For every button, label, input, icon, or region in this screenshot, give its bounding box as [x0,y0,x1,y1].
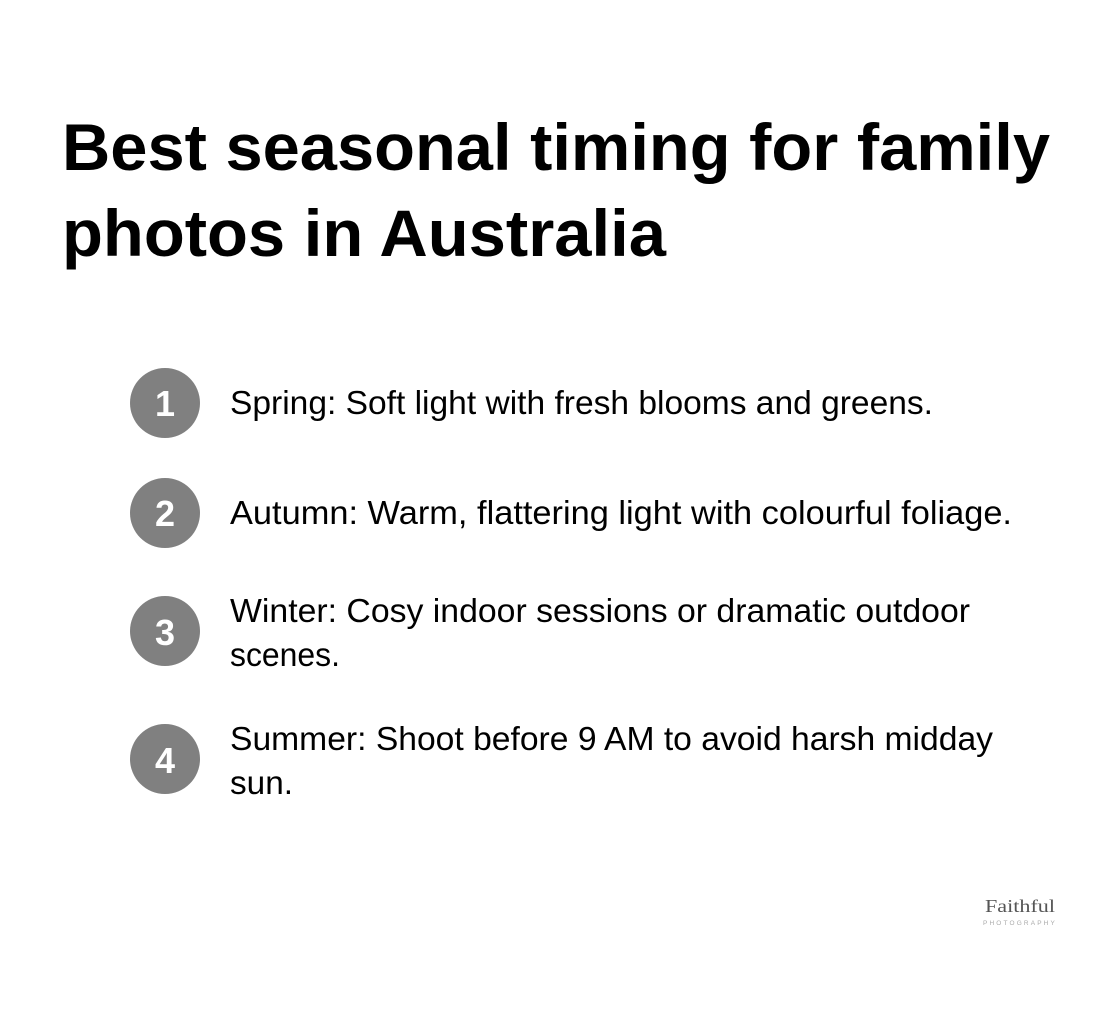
text: winter: scenes. [230,637,340,674]
logo: Faithful Photography [983,896,1057,927]
number badge 4: 4 [155,740,175,781]
number badge 4 [130,724,200,794]
text: winter [230,593,970,674]
list item 3: winter [130,593,970,674]
number badge 2 [130,478,200,548]
number badge 3: 3 [155,612,175,653]
text: winter: Winter: Cosy indoor sessions or dramatic outdoor [230,593,970,630]
text: summer: sun. [230,765,293,802]
title: Best seasonal timing for family [62,110,1050,184]
number badge 3 [130,596,200,666]
list item 2: autumn [130,478,1012,548]
title [62,110,1050,270]
number badge 2: 2 [155,493,175,534]
logo: Faithful Photography: PHOTOGRAPHY [983,921,1057,927]
text: autumn: Autumn: Warm, flattering light with colourful foliage. [230,495,1012,532]
list item 1: spring [130,368,933,438]
text: summer: Summer: Shoot before 9 AM to avoid harsh midday [230,721,993,758]
logo: Faithful Photography: Faithful [985,896,1055,916]
text: summer [230,721,993,802]
number badge 1: 1 [155,383,175,424]
text: spring: Spring: Soft light with fresh blooms and greens. [230,385,933,422]
list item 4: summer [130,721,993,802]
number badge 1 [130,368,200,438]
title: photos in Australia [62,196,667,270]
